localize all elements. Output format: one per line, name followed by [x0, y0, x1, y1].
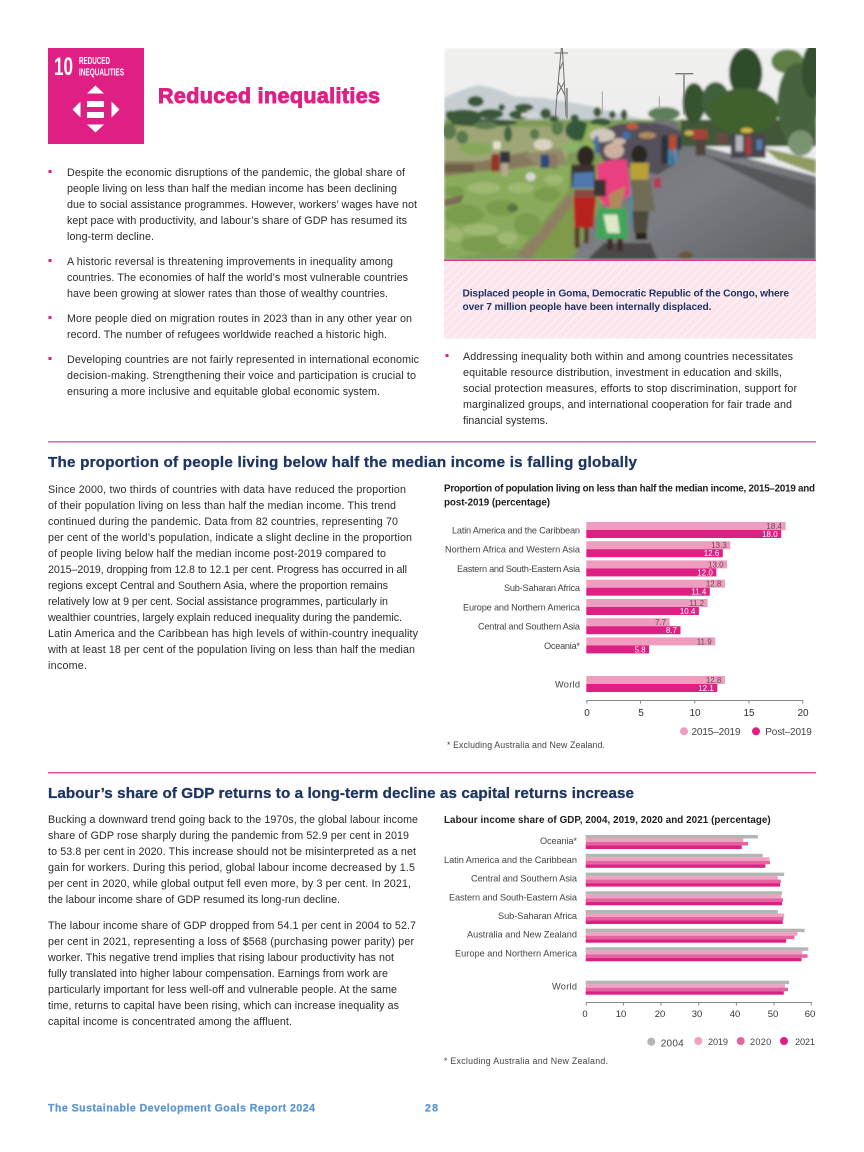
legend: chart 2: 2020 [750, 1037, 771, 1047]
text block: section 2: per cent in 2020, while global output fell even more, by 3 per cent. In 2021, [48, 878, 411, 890]
legend: chart 1: 2015–2019 [692, 727, 741, 738]
chart title: section 1: post-2019 (percentage) [444, 498, 550, 508]
row: World: World [555, 680, 580, 690]
caption text: Displaced people in Goma, Democratic Republic of the Congo, where [462, 288, 789, 300]
bullet: right column: financial systems. [463, 415, 548, 427]
woman right [630, 145, 661, 240]
power pylons and poles [555, 48, 693, 119]
text block: section 2: particularly important for less well-off and vulnerable people. At the same [48, 984, 397, 996]
row: Oceania: 5.8 [634, 645, 646, 654]
row: Eastern and South-Eastern Asia: Eastern and South-Eastern Asia [457, 564, 581, 574]
row: Latin America and the Caribbean [444, 854, 770, 868]
row: Eastern and South-Eastern Asia [457, 560, 727, 577]
row: Oceania: Oceania* [540, 836, 577, 846]
bullet list: left column: Developing countries are not fairly represented in international economic [67, 354, 420, 366]
road [572, 120, 816, 260]
bullet list: left column: A historic reversal is threatening improvements in inequality among [67, 256, 393, 268]
caption text: over 7 million people have been internally displaced. [462, 302, 712, 313]
row: Northern Africa and Western Asia: 13.3 [711, 541, 727, 550]
bullet: right column: equitable resource distribution, investment in education and skills, [463, 367, 782, 379]
footnote: chart 2: * Excluding Australia and New Zealand. [444, 1056, 608, 1066]
bullet list: left column: ensuring a more inclusive and equitable global economic system. [67, 386, 380, 398]
bullet: right column: social protection measures, efforts to stop discrimination, support for [463, 383, 797, 395]
text block: section 1: with at least 18 per cent of the population living on less than half the median [47, 644, 415, 656]
title: Reduced inequalities [158, 84, 380, 108]
row: Europe and Northern America: Europe and Northern America [463, 602, 581, 612]
row: Northern Africa and Western Asia: Northern Africa and Western Asia [445, 545, 581, 555]
x axis: 20 [797, 708, 809, 719]
woman centre [594, 143, 631, 251]
row: Europe and Northern America [463, 599, 708, 616]
chart title: section 1 [444, 484, 815, 508]
text block: section 1: income. [48, 660, 87, 672]
row: World: World [552, 982, 577, 992]
text block: section 2: fully translated into higher labour compensation. Earnings from work are [48, 968, 388, 980]
row: Latin America and the Caribbean: 18.0 [762, 530, 778, 539]
bullet list: left column: record. The number of refugees worldwide reached a historic high. [67, 329, 387, 341]
icon: equals with four arrows [72, 86, 120, 132]
photo: displaced people on a road in Goma [442, 45, 823, 261]
text block: section 1: 2015–2019, dropping from 12.8 to 12.1 per cent. Progress has occurred in all [48, 564, 407, 576]
row: Central and Southern Asia [471, 873, 784, 887]
x axis: 0 [582, 1009, 588, 1020]
row: Central and Southern Asia: 7.7 [655, 618, 667, 627]
bar chart: labour income share of GDP [444, 835, 815, 1020]
text block: section 1: continued during the pandemic. Data from 82 countries, representing 70 [48, 516, 398, 528]
row: Northern Africa and Western Asia [445, 541, 730, 558]
field figures [491, 139, 559, 181]
row: World: 12.8 [706, 676, 722, 685]
x axis: 30 [692, 1009, 702, 1020]
text block: section 1: per cent of the world’s population, indicate a slight decline in the proportion [48, 532, 412, 544]
row: Latin America and the Caribbean: 18.4 [766, 522, 783, 531]
row: Eastern and South-Eastern Asia [449, 891, 783, 905]
footer: report name: The Sustainable Development Goals Report 2024 [48, 1102, 315, 1114]
bullet list: left column: decision-making. Strengthening their voice and participation is crucial to [67, 370, 416, 382]
legend: chart 1: Post–2019 [765, 727, 812, 738]
text block: section 2: the labour income share of GDP resumed its long-run decline. [48, 894, 340, 906]
text block: section 2: gain for workers. During this period, global labour income decreased by 1.5 [48, 862, 415, 874]
bullet list: left column: have been growing at slower rates than those of wealthy countries. [67, 288, 388, 300]
row: Eastern and South-Eastern Asia: Eastern and South-Eastern Asia [449, 892, 578, 902]
text block: section 1: Since 2000, two thirds of countries with data have reduced the proportion [48, 484, 406, 496]
row: Oceania [544, 637, 715, 654]
row: Latin America and the Caribbean: Latin America and the Caribbean [444, 855, 577, 865]
text block: section 1 [47, 484, 419, 672]
row: Central and Southern Asia [478, 618, 680, 635]
footnote: chart 1: * Excluding Australia and New Zealand. [447, 740, 605, 750]
row: Eastern and South-Eastern Asia: 13.0 [708, 560, 724, 569]
text block: section 1: Latin America and the Caribbean has high levels of within-country inequality [48, 628, 419, 640]
text block: section 2: time, returns to capital have been rising, which can increase inequality as [48, 1000, 399, 1012]
row: Europe and Northern America [455, 947, 808, 961]
caption panel [444, 260, 816, 338]
x axis: 10 [689, 708, 701, 719]
text block: section 1: regions except Central and Southern Asia, where the proportion remains [48, 580, 388, 592]
row: Sub-Saharan Africa [498, 910, 784, 924]
x axis: 5 [638, 708, 644, 719]
bullet: right column: Addressing inequality both within and among countries necessitates [463, 351, 793, 363]
trees on right [648, 45, 823, 156]
x axis: 0 [584, 708, 590, 719]
goal number: 10 [54, 53, 73, 81]
bullet list: left column: due to social assistance programmes. However, workers’ wages have not [67, 199, 417, 211]
legend: chart 2 [647, 1037, 815, 1050]
x axis: 50 [768, 1009, 778, 1020]
caption text [462, 288, 789, 313]
row: Sub-Saharan Africa: Sub-Saharan Africa [498, 911, 578, 921]
x axis [582, 1002, 815, 1020]
bullet: right column [446, 351, 797, 427]
row: Oceania: Oceania* [544, 641, 580, 651]
text block: section 1: relatively low at 9 per cent. Social assistance programmes, particularly in [48, 596, 388, 608]
legend: chart 2: 2019 [708, 1037, 728, 1047]
row: Latin America and the Caribbean [452, 522, 786, 539]
x axis [584, 700, 809, 719]
chart title: section 2: Labour income share of GDP, 2004, 2019, 2020 and 2021 (percentage) [444, 815, 771, 826]
footer: page number: 28 [425, 1102, 438, 1114]
x axis: 40 [730, 1009, 740, 1020]
text block: section 1: wealthier countries, largely explain reduced inequality during the pandemic. [47, 612, 402, 624]
row: Northern Africa and Western Asia: 12.6 [704, 549, 720, 558]
distant crowd right [684, 128, 766, 158]
row: World [552, 981, 789, 995]
goal name [79, 55, 124, 78]
row: Europe and Northern America: Europe and Northern America [455, 948, 578, 958]
row: Eastern and South-Eastern Asia: 12.0 [697, 568, 713, 577]
row: Sub-Saharan Africa: 11.4 [691, 588, 707, 597]
row: Europe and Northern America: 11.2 [689, 599, 705, 608]
text block: section 2: The labour income share of GDP dropped from 54.1 per cent in 2004 to 52.7 [48, 920, 416, 932]
bullet list: left column: people living on less than half the median income has been declining [67, 183, 397, 195]
heading: section 2: Labour’s share of GDP returns to a long-term decline as capital returns increase [48, 785, 634, 802]
row: World [555, 676, 725, 693]
text block: section 2 [47, 814, 418, 1028]
text block: section 2: to 53.8 per cent in 2020. This increase should not be misinterpreted as a net [48, 846, 416, 858]
heading: section 1: The proportion of people living below half the median income is falling globally [48, 454, 638, 471]
x axis: 15 [743, 708, 755, 719]
row: Oceania [540, 835, 758, 849]
bullet list: left column [48, 167, 420, 398]
text block: section 2: per cent in 2021, representing a loss of $568 (purchasing power parity) per [48, 936, 414, 948]
text block: section 2: share of GDP rose sharply during the pandemic from 52.9 per cent in 2019 [48, 830, 409, 842]
bullet list: left column: More people died on migration routes in 2023 than in any other year on [67, 313, 412, 325]
x axis: 10 [616, 1009, 626, 1020]
goal name: REDUCED [79, 55, 110, 67]
goal name: INEQUALITIES [79, 66, 124, 78]
row: Central and Southern Asia: Central and Southern Asia [478, 622, 581, 632]
x axis: 60 [805, 1009, 815, 1020]
bullet list: left column: kept pace with productivity, and labour’s share of GDP has resumed its [67, 215, 407, 227]
row: Latin America and the Caribbean: Latin America and the Caribbean [452, 526, 580, 536]
row: Sub-Saharan Africa: Sub-Saharan Africa [504, 583, 581, 593]
woman left [571, 146, 596, 248]
bar chart: population below half median income [445, 522, 809, 719]
row: Australia and New Zealand: Australia and New Zealand [467, 930, 577, 940]
legend: chart 2: 2021 [795, 1037, 815, 1047]
text block: section 1: of people living below half the median income post-2019 compared to [48, 548, 386, 560]
row: World: 12.1 [698, 684, 714, 693]
bullet list: left column: Despite the economic disruptions of the pandemic, the global share of [67, 167, 405, 179]
bullet list: left column: countries. The economies of half the world’s most vulnerable countries [67, 272, 408, 284]
text block: section 2: worker. This negative trend implies that rising labour productivity has not [47, 952, 394, 964]
bullet list: left column: long-term decline. [67, 231, 154, 243]
row: Oceania: 11.9 [697, 637, 712, 646]
chart title: section 1: Proportion of population living on less than half the median income, 2015–2019 and [444, 484, 815, 494]
x axis: 20 [655, 1009, 665, 1020]
text block: section 1: of their population living on less than half the median income. This trend [48, 500, 396, 512]
legend: chart 2: 2004 [661, 1038, 684, 1050]
legend: chart 1 [680, 727, 812, 738]
SDG 10 badge [48, 48, 144, 144]
row: Australia and New Zealand [467, 929, 805, 943]
text block: section 2: capital income is concentrated among the affluent. [48, 1016, 292, 1028]
row: Sub-Saharan Africa [504, 580, 725, 597]
row: Sub-Saharan Africa: 12.8 [706, 580, 722, 589]
row: Central and Southern Asia: 8.7 [666, 626, 678, 635]
row: Europe and Northern America: 10.4 [680, 607, 696, 616]
bullet: right column: marginalized groups, and international cooperation for fair trade and [463, 399, 792, 411]
row: Central and Southern Asia: Central and Southern Asia [471, 874, 578, 884]
text block: section 2: Bucking a downward trend going back to the 1970s, the global labour income [48, 814, 418, 826]
crowd behind [590, 122, 681, 175]
